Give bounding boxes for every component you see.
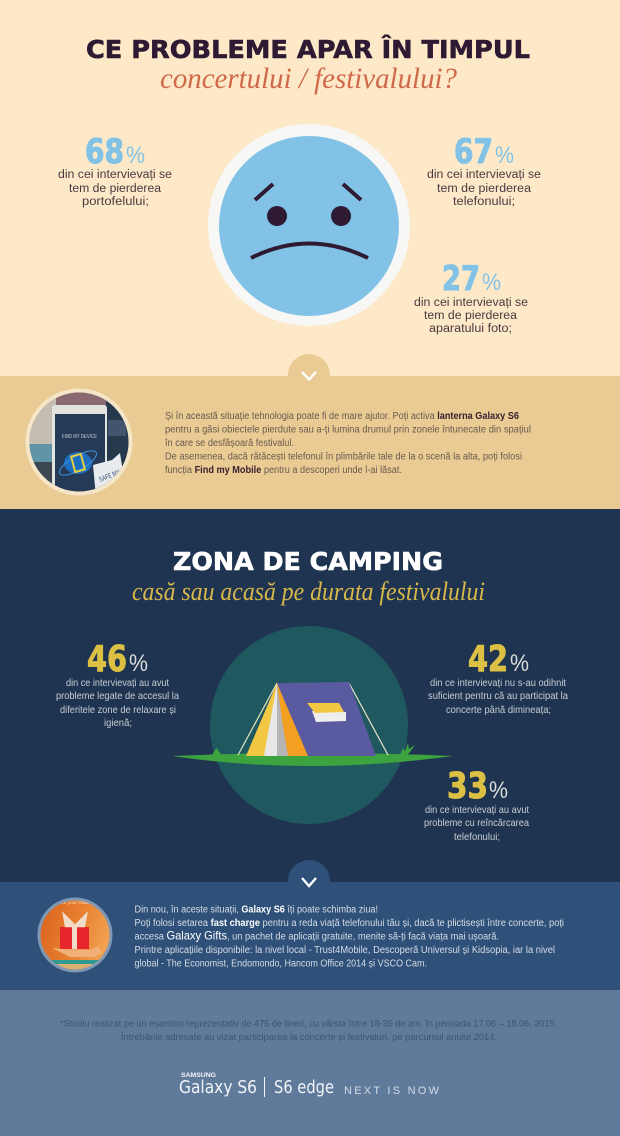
panel: footer [0, 990, 620, 1136]
stat: 46%: % [129, 650, 148, 677]
stat: 67%: % [495, 142, 514, 169]
subtitle: concertului / festivalului? [160, 62, 457, 95]
stat: 68%: % [126, 142, 145, 169]
logo: Samsung Galaxy S6 [179, 1073, 440, 1098]
stat: 68%: portofelului; [82, 196, 149, 208]
logo: Samsung Galaxy S6: SAMSUNG [181, 1073, 216, 1079]
text block: tip [164, 411, 531, 476]
icon: find my device phone [26, 388, 133, 497]
stat: 68%: din cei intervievați se [58, 169, 172, 181]
stat: 27%: % [482, 269, 501, 296]
subtitle: casă sau acasă pe durata festivalului [132, 577, 485, 606]
panel: technology tip [0, 354, 620, 509]
title: CE PROBLEME APAR ÎN TIMPUL [86, 35, 530, 64]
stat: 68% [58, 132, 172, 208]
title: ZONA DE CAMPING [173, 547, 443, 576]
arrow tab [288, 354, 330, 380]
panel: camping zone [0, 509, 620, 882]
stat: 67%: din cei intervievați se [427, 169, 541, 181]
icon: find my device phone: FIND MY DEVICE [62, 434, 98, 440]
stat: 67%: 67 [454, 132, 493, 172]
logo: Samsung Galaxy S6: Galaxy S6 [179, 1077, 257, 1098]
text block: study note: *Studiu realizat pe un eșantion reprezentativ de 475 de tineri, cu vârsta între 18-35 de ani, în perioada 17.06 – 18.06. 2015. [60, 1018, 557, 1030]
stat: 42%: suficient pentru că au participat la [428, 690, 568, 702]
stat: 46% [56, 639, 179, 729]
stat: 27%: aparatului foto; [429, 323, 512, 335]
text block: tip: accesa Galaxy Gifts, un pachet de aplicații gratuite, menite să-ți facă viața mai ușoară. [134, 928, 499, 942]
stat: 27% [414, 259, 528, 335]
icon: sad face [208, 124, 410, 326]
logo: Samsung Galaxy S6: NEXT IS NOW [344, 1085, 440, 1097]
text block: tip: Din nou, în aceste situații, Galaxy S6 îți poate schimba ziua! [134, 904, 378, 916]
stat: 33% [424, 766, 529, 843]
text block: tip [134, 904, 564, 970]
text block: tip: în care se desfășoară festivalul. [164, 438, 294, 449]
stat: 42%: % [510, 650, 529, 677]
stat: 27%: din cei intervievați se [414, 297, 528, 309]
stat: 46%: probleme legate de accesul la [56, 690, 179, 702]
stat: 33%: din ce intervievați au avut [425, 804, 529, 816]
stat: 33%: probleme cu reîncărcarea [424, 817, 529, 829]
text block: tip: global - The Economist, Endomondo, Hancom Office 2014 și VSCO Cam. [134, 958, 427, 970]
stat: 68%: 68 [85, 132, 124, 172]
icon: find my device phone: SAFE MY [98, 469, 121, 484]
stat: 67%: telefonului; [453, 196, 515, 208]
panel: fast charge tip [0, 860, 620, 990]
text block: tip: Poți folosi setarea fast charge pentru a reda viață telefonului tău și, dacă te plictisești între concerte, poți [134, 918, 564, 929]
text block: tip: funcția Find my Mobile pentru a descoperi unde l-ai lăsat. [165, 465, 402, 476]
arrow tab [288, 860, 330, 886]
icon: gift: for your Galaxy [61, 900, 94, 905]
text block: tip: Printre aplicațiile disponibile: la nivel local - Trust4Mobile, Descoperă Universul și Kidsopia, iar la nivel [134, 945, 555, 956]
text block: tip: pentru a găsi obiectele pierdute sau a-ți lumina drumul prin zonele întunecate din spațiul [165, 424, 531, 436]
stat: 42%: concerte până dimineața; [446, 704, 551, 716]
text block: study note: Întrebările adresate au vizat participarea la concerte și festivaluri, pe parcursul anului 2014. [120, 1032, 497, 1043]
stat: 33%: telefonului; [454, 831, 500, 843]
text block: tip: De asemenea, dacă rătăcești telefonul în plimbările tale de la o scenă la alta, poți folosi [165, 452, 522, 462]
stat: 27%: tem de pierderea [424, 310, 518, 322]
stat: 46%: din ce intervievați au avut [66, 677, 169, 689]
illustration: tent [172, 626, 453, 824]
stat: 33%: 33 [447, 766, 488, 807]
stat: 42% [428, 639, 568, 716]
stat: 46%: 46 [87, 639, 127, 680]
stat: 67%: tem de pierderea [437, 183, 532, 195]
stat: 46%: diferitele zone de relaxare și [60, 704, 176, 716]
panel: concert problems [0, 0, 620, 376]
text block: tip: Și în această situație tehnologia poate fi de mare ajutor. Poți activa lanterna Galaxy S6 [165, 411, 519, 422]
logo: Samsung Galaxy S6: S6 edge [274, 1077, 334, 1098]
stat: 67% [427, 132, 541, 208]
stat: 33%: % [489, 777, 508, 804]
stat: 68%: tem de pierderea [69, 183, 162, 195]
stat: 42%: 42 [468, 639, 508, 680]
icon: gift [38, 898, 112, 972]
text block: study note [60, 1018, 557, 1043]
stat: 27%: 27 [442, 259, 480, 299]
stat: 46%: igienă; [104, 717, 132, 729]
stat: 42%: din ce intervievați nu s-au odihnit [430, 677, 566, 689]
